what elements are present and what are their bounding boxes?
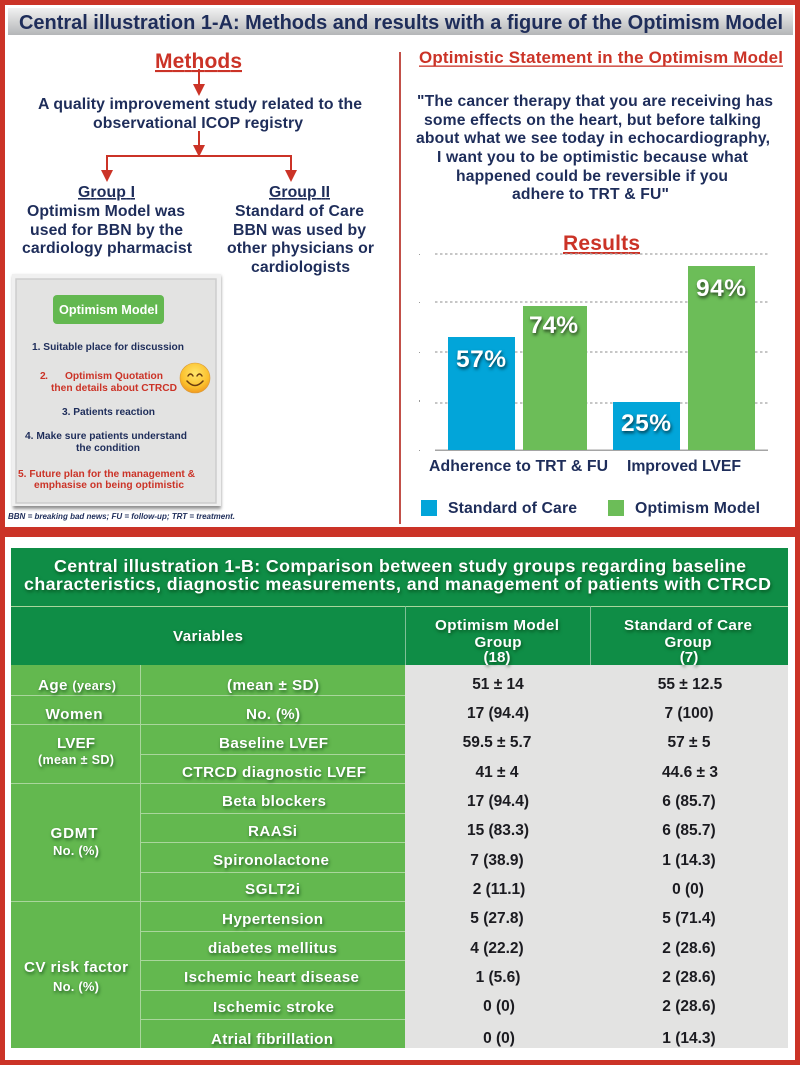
text block: optimistic quote: "The cancer therapy that you are receiving has <box>417 93 773 110</box>
text block: optimistic quote: happened could be reversible if you <box>456 168 728 185</box>
step 2 <box>40 371 177 394</box>
text block: group I: Group I <box>78 184 135 201</box>
text block: group II: Group II <box>269 184 330 201</box>
bar value labels: 74% <box>529 312 578 339</box>
standard of care group values: 57 ± 5 <box>668 734 711 751</box>
heading: methods: Methods <box>155 50 242 73</box>
table title: characteristics, diagnostic measurements, and management of patients with CTRCD <box>24 574 771 594</box>
optimism model group values: 17 (94.4) <box>467 793 529 810</box>
optimism model group values: 15 (83.3) <box>467 822 529 839</box>
row variable labels: diabetes mellitus <box>208 940 337 957</box>
text block: group I <box>22 184 193 257</box>
bar: adherence optimism model 74% <box>523 306 587 450</box>
text block: optimistic quote: I want you to be optimistic because what <box>437 149 749 166</box>
step 4 <box>25 431 187 454</box>
standard of care group values: 6 (85.7) <box>662 822 716 839</box>
row group labels: Age (years) <box>38 677 116 694</box>
row group labels: No. (%) <box>53 979 99 994</box>
optimism model group values: 0 (0) <box>483 998 515 1015</box>
bar value labels <box>456 275 746 437</box>
row group labels: No. (%) <box>53 843 99 858</box>
table title <box>24 556 771 594</box>
bar value labels: 25% <box>621 410 671 437</box>
legend <box>421 500 760 517</box>
row variable labels: Ischemic stroke <box>213 999 334 1016</box>
text block: optimistic quote: about what we see today in echocardiography, <box>416 130 770 147</box>
row group labels: (mean ± SD) <box>38 753 114 767</box>
bar: improved LVEF optimism model 94% <box>688 266 755 450</box>
row label background <box>11 665 405 1048</box>
row variable labels: Ischemic heart disease <box>184 969 359 986</box>
row variable labels: No. (%) <box>246 706 300 723</box>
step 5: emphasise on being optimistic <box>34 480 184 491</box>
vertical divider <box>399 52 401 524</box>
optimism model group values: 5 (27.8) <box>470 910 524 927</box>
column headers: Group <box>664 634 712 651</box>
category labels <box>429 458 741 475</box>
optimism model group values: 51 ± 14 <box>472 676 524 693</box>
optimism model group values: 17 (94.4) <box>467 705 529 722</box>
text block: group I: cardiology pharmacist <box>22 240 193 257</box>
standard of care group values: 2 (28.6) <box>662 940 716 957</box>
column headers: Optimism Model <box>435 617 559 634</box>
row variable labels: Beta blockers <box>222 793 326 810</box>
legend: Optimism Model <box>635 500 760 517</box>
text block: group II: other physicians or <box>227 240 374 257</box>
row group labels: CV risk factor <box>24 959 128 976</box>
text block: group II: cardiologists <box>251 259 350 276</box>
row group labels: Women <box>46 706 102 723</box>
standard of care group values <box>658 676 723 1047</box>
optimism model badge <box>53 295 164 324</box>
row variable labels: Hypertension <box>222 911 323 928</box>
column headers: (7) <box>680 649 698 666</box>
row group labels <box>24 677 128 994</box>
text block: optimistic quote <box>416 93 773 203</box>
optimism model group values <box>463 676 531 1047</box>
column headers: Variables <box>173 628 243 645</box>
row variable labels: CTRCD diagnostic LVEF <box>182 764 366 781</box>
row variable labels: Atrial fibrillation <box>211 1031 333 1048</box>
footnote: BBN = breaking bad news; FU = follow-up; TRT = treatment. <box>8 512 235 521</box>
column headers: Standard of Care <box>624 617 752 634</box>
step 5 <box>18 469 196 491</box>
bar chart: results <box>419 254 768 475</box>
standard of care group values: 6 (85.7) <box>662 793 716 810</box>
standard of care group values: 7 (100) <box>664 705 714 722</box>
text block: study description <box>38 96 362 132</box>
standard of care group values: 55 ± 12.5 <box>658 676 723 693</box>
optimism model group values: 0 (0) <box>483 1030 515 1047</box>
category labels: Adherence to TRT & FU <box>429 458 608 475</box>
text block: optimistic quote: adhere to TRT & FU" <box>512 186 669 203</box>
optimism model group values: 4 (22.2) <box>470 940 524 957</box>
standard of care group values: 1 (14.3) <box>662 852 716 869</box>
bar: improved LVEF standard of care 25% <box>613 402 680 450</box>
row variable labels: (mean ± SD) <box>227 677 319 694</box>
optimism model group values: 41 ± 4 <box>476 764 519 781</box>
standard of care group values: 0 (0) <box>672 881 704 898</box>
icon: smiling face <box>180 363 210 393</box>
column headers <box>173 617 752 666</box>
bar value labels: 57% <box>456 346 506 373</box>
step 4: the condition <box>76 443 140 454</box>
legend: Standard of Care <box>448 500 577 517</box>
column headers: (18) <box>483 649 511 666</box>
bar value labels: 94% <box>696 275 746 302</box>
text block: study description: observational ICOP registry <box>93 115 303 132</box>
standard of care group values: 44.6 ± 3 <box>662 764 718 781</box>
row group labels: GDMT <box>50 825 98 842</box>
text block: group II <box>227 184 374 276</box>
step 2: then details about CTRCD <box>51 383 177 394</box>
table title: Central illustration 1-B: Comparison between study groups regarding baseline <box>54 556 746 576</box>
optimism model group values: 7 (38.9) <box>470 852 524 869</box>
standard of care group values: 2 (28.6) <box>662 998 716 1015</box>
text block: study description: A quality improvement study related to the <box>38 96 362 113</box>
row variable labels: Baseline LVEF <box>219 735 328 752</box>
row variable labels: Spironolactone <box>213 852 329 869</box>
standard of care group values: 2 (28.6) <box>662 969 716 986</box>
optimism model badge: Optimism Model <box>59 303 158 317</box>
panel: optimism model figure <box>12 274 221 509</box>
title bar: Central illustration 1-A: Methods and results with a figure of the Optimism Model <box>19 12 783 34</box>
row variable labels: RAASi <box>248 823 297 840</box>
step 2: 2. <box>40 371 48 382</box>
arrow: methods to study <box>193 69 205 96</box>
standard of care group values: 5 (71.4) <box>662 910 716 927</box>
data background <box>405 665 788 1048</box>
text block: group I: used for BBN by the <box>30 222 183 239</box>
step 3: 3. Patients reaction <box>62 407 155 418</box>
step 4: 4. Make sure patients understand <box>25 431 187 442</box>
step 2: Optimism Quotation <box>65 371 163 382</box>
step 5: 5. Future plan for the management & <box>18 469 196 480</box>
text block: group II: Standard of Care <box>235 203 364 220</box>
optimism model group values: 59.5 ± 5.7 <box>463 734 531 751</box>
table header background <box>11 548 788 665</box>
optimism model group values: 1 (5.6) <box>476 969 520 986</box>
text block: group II: BBN was used by <box>233 222 366 239</box>
category labels: Improved LVEF <box>627 458 741 475</box>
row variable labels: SGLT2i <box>245 881 300 898</box>
standard of care group values: 1 (14.3) <box>662 1030 716 1047</box>
heading: results: Results <box>563 232 640 255</box>
panel: central illustration 1-A <box>5 5 795 527</box>
text block: group I: Optimism Model was <box>27 203 185 220</box>
step 1: 1. Suitable place for discussion <box>32 342 184 353</box>
heading: optimistic statement: Optimistic Statement in the Optimism Model <box>419 48 783 67</box>
bar: adherence standard of care 57% <box>448 337 515 450</box>
text block: optimistic quote: some effects on the heart, but before talking <box>424 112 761 129</box>
column headers: Group <box>474 634 522 651</box>
panel: central illustration 1-B <box>5 537 795 1060</box>
row group labels: LVEF <box>57 735 95 752</box>
arrow: study splits to groups <box>101 131 297 182</box>
row variable labels <box>182 677 366 1048</box>
optimism model group values: 2 (11.1) <box>473 881 525 898</box>
